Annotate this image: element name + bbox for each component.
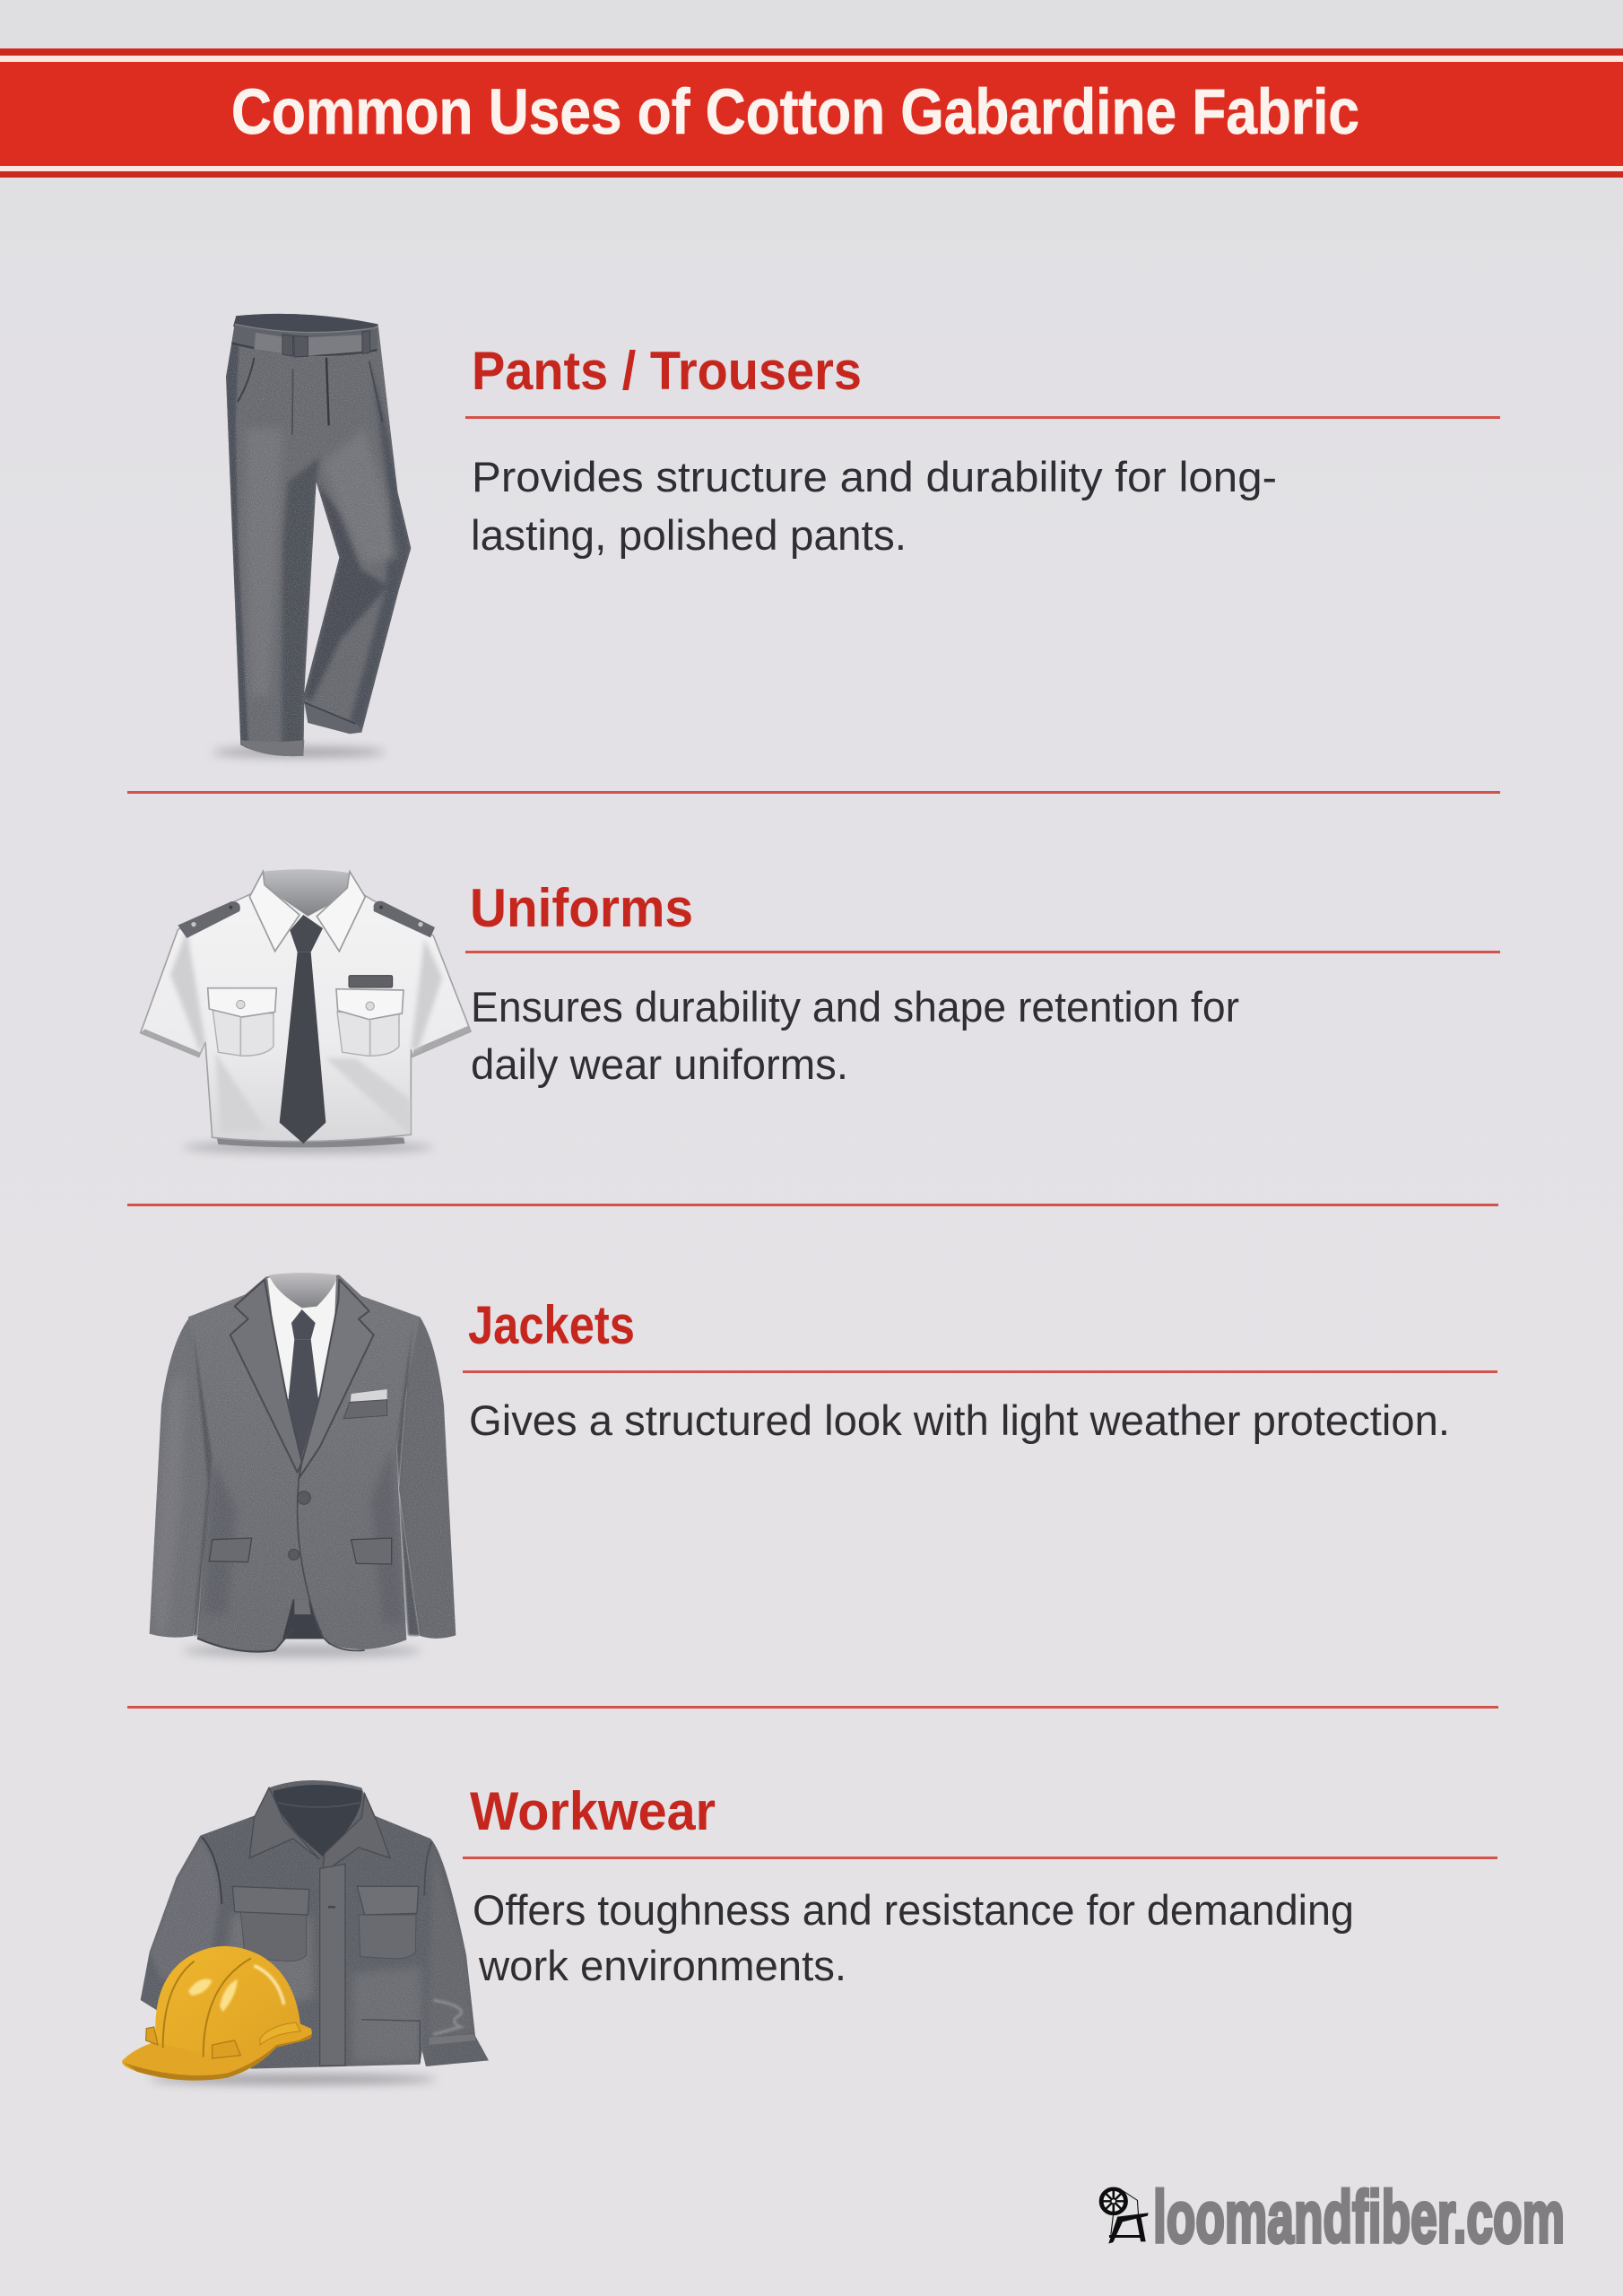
panel: pants / trousers	[213, 312, 1500, 759]
text: pants description: Provides structure and durability for long-	[472, 453, 1277, 500]
icon: hard hat	[122, 1946, 312, 2081]
panel: jackets	[146, 1273, 1497, 1657]
icon: uniform shirt	[141, 869, 471, 1152]
rule	[463, 1370, 1497, 1373]
text: workwear description	[473, 1886, 1354, 1989]
icon: pants	[213, 312, 415, 759]
text: pants description: lasting, polished pants.	[471, 511, 907, 559]
text: uniforms description: Ensures durability and shape retention for	[471, 983, 1239, 1031]
text: workwear description: Offers toughness and resistance for demanding	[473, 1886, 1354, 1934]
text: uniforms description: daily wear uniforms.	[471, 1040, 848, 1088]
text: uniforms description	[471, 983, 1239, 1088]
rule	[463, 1857, 1497, 1859]
icon: spinning wheel	[1101, 2188, 1149, 2244]
icon: work jacket and hard hat	[122, 1776, 490, 2084]
heading: workwear: Workwear	[470, 1781, 716, 1841]
text: workwear description: work environments.	[478, 1942, 846, 1989]
text: jackets description: Gives a structured look with light weather protection.	[469, 1396, 1450, 1444]
rule	[465, 416, 1500, 419]
text: pants description	[471, 453, 1277, 559]
logo: loomandfiber.com	[1101, 2177, 1565, 2258]
panel: uniforms	[141, 869, 1500, 1152]
rule	[465, 951, 1500, 953]
title banner	[0, 48, 1623, 178]
panel: workwear	[122, 1776, 1497, 2084]
heading: pants: Pants / Trousers	[472, 341, 862, 401]
heading: jackets: Jackets	[468, 1295, 635, 1355]
title: Common Uses of Cotton Gabardine Fabric	[231, 77, 1359, 148]
icon: work jacket	[137, 1776, 490, 2072]
icon: jacket	[146, 1273, 460, 1657]
heading: uniforms: Uniforms	[470, 878, 693, 938]
